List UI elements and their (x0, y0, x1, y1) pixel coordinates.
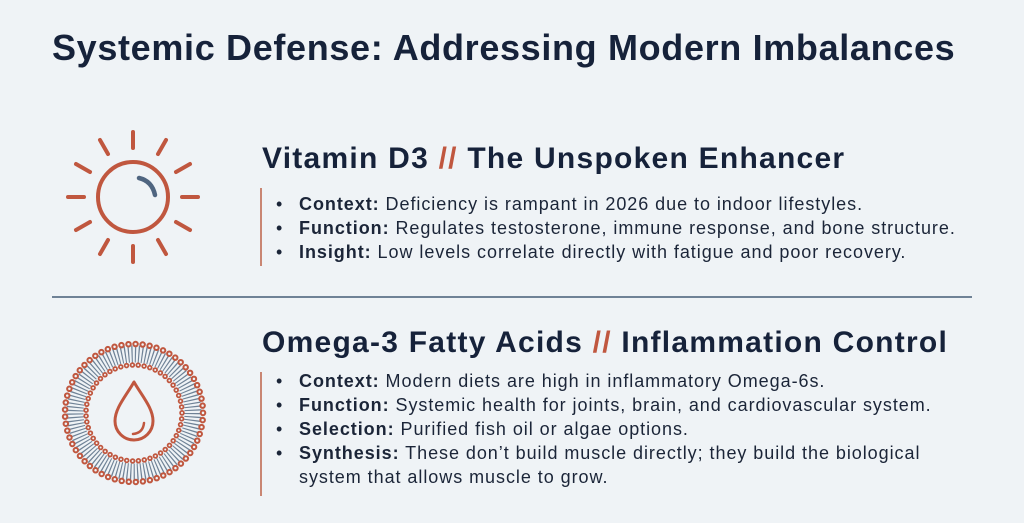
heading: omega-3: Omega-3 Fatty Acids // Inflammation Control (262, 326, 948, 359)
heading: vitamin D3: Vitamin D3 // The Unspoken Enhancer (262, 142, 845, 175)
list: omega-3: Function: Systemic health for joints, brain, and cardiovascular system. (299, 395, 932, 415)
list: vitamin D3: Insight: Low levels correlate directly with fatigue and poor recovery. (299, 242, 906, 262)
icon: omega-3 membrane (62, 340, 206, 486)
icon: sun (66, 130, 200, 264)
list: omega-3: Synthesis: These don’t build muscle directly; they build the biological (299, 443, 920, 463)
list: omega-3 (276, 371, 932, 487)
list: vitamin D3: Function: Regulates testosterone, immune response, and bone structure. (299, 218, 956, 238)
title: Systemic Defense: Addressing Modern Imbalances (52, 27, 955, 68)
list: omega-3: Context: Modern diets are high in inflammatory Omega-6s. (299, 371, 825, 391)
list: vitamin D3: Context: Deficiency is rampant in 2026 due to indoor lifestyles. (299, 194, 863, 214)
list: vitamin D3 (276, 194, 956, 262)
list: omega-3: system that allows muscle to grow. (299, 467, 608, 487)
list: omega-3: Selection: Purified fish oil or algae options. (299, 419, 689, 439)
